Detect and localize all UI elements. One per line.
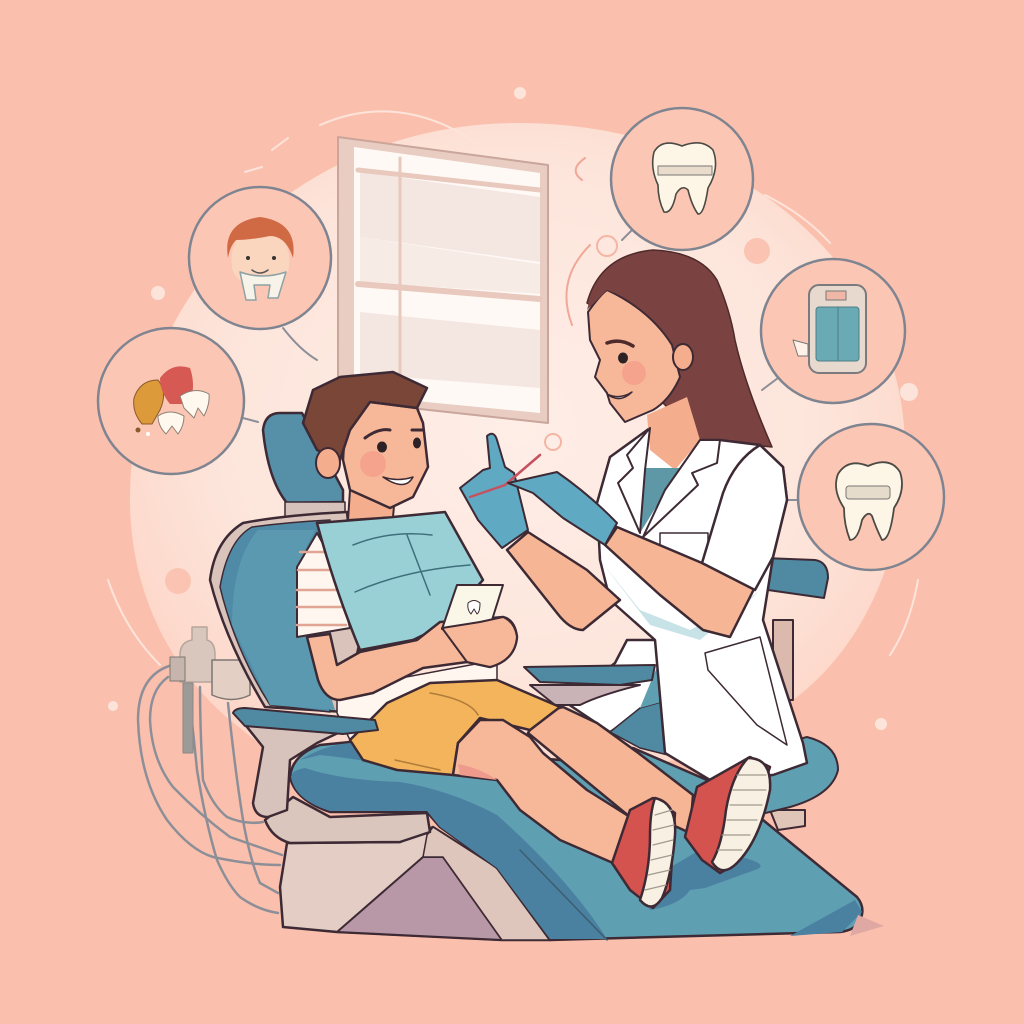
child near leg [453, 720, 630, 863]
child near shoe [612, 798, 675, 908]
dentist left forearm [507, 532, 620, 630]
dentist collar [618, 428, 650, 533]
background accents [108, 87, 918, 730]
dentist hair [587, 250, 772, 447]
dental chair seat [290, 742, 862, 940]
background blob [130, 123, 905, 800]
child arm and hand [307, 617, 517, 700]
dentist [460, 250, 807, 780]
dental equipment [138, 627, 282, 913]
dentist coat lower left panel [565, 640, 660, 732]
child neck [348, 490, 395, 520]
chair arm left [233, 708, 378, 734]
headrest [263, 413, 343, 503]
icon circle: tooth with bracket [798, 424, 944, 570]
dentist pants [610, 700, 668, 755]
dentist right forearm [605, 527, 755, 637]
chair base [243, 722, 550, 940]
child [297, 372, 770, 908]
dentist shirt [635, 468, 680, 533]
dentist neck [647, 397, 700, 470]
dentist coat [597, 428, 807, 780]
child fingers [442, 617, 517, 667]
shoe shadow [640, 850, 761, 910]
child far leg [528, 707, 693, 833]
armrest right [524, 665, 655, 705]
icon circle: cup of water [761, 259, 905, 403]
floor shadow [850, 915, 884, 936]
dentist face [588, 290, 680, 422]
child shirt hem [337, 660, 497, 740]
child far shoe [685, 757, 770, 873]
child shirt sleeve [297, 533, 350, 637]
window [338, 137, 548, 423]
dentist right glove [508, 472, 617, 545]
icon circle: sweets and teeth [98, 328, 244, 474]
dental chair back [210, 413, 360, 712]
child shorts [350, 680, 560, 775]
dentist left glove [460, 434, 528, 548]
child bib [317, 512, 483, 650]
icon circle: tooth with braces [611, 108, 753, 250]
dentist stool [720, 558, 838, 830]
card with tooth [442, 585, 503, 629]
dentist sleeve [702, 445, 787, 590]
child head [343, 402, 428, 508]
icon circle: child face [189, 187, 331, 329]
